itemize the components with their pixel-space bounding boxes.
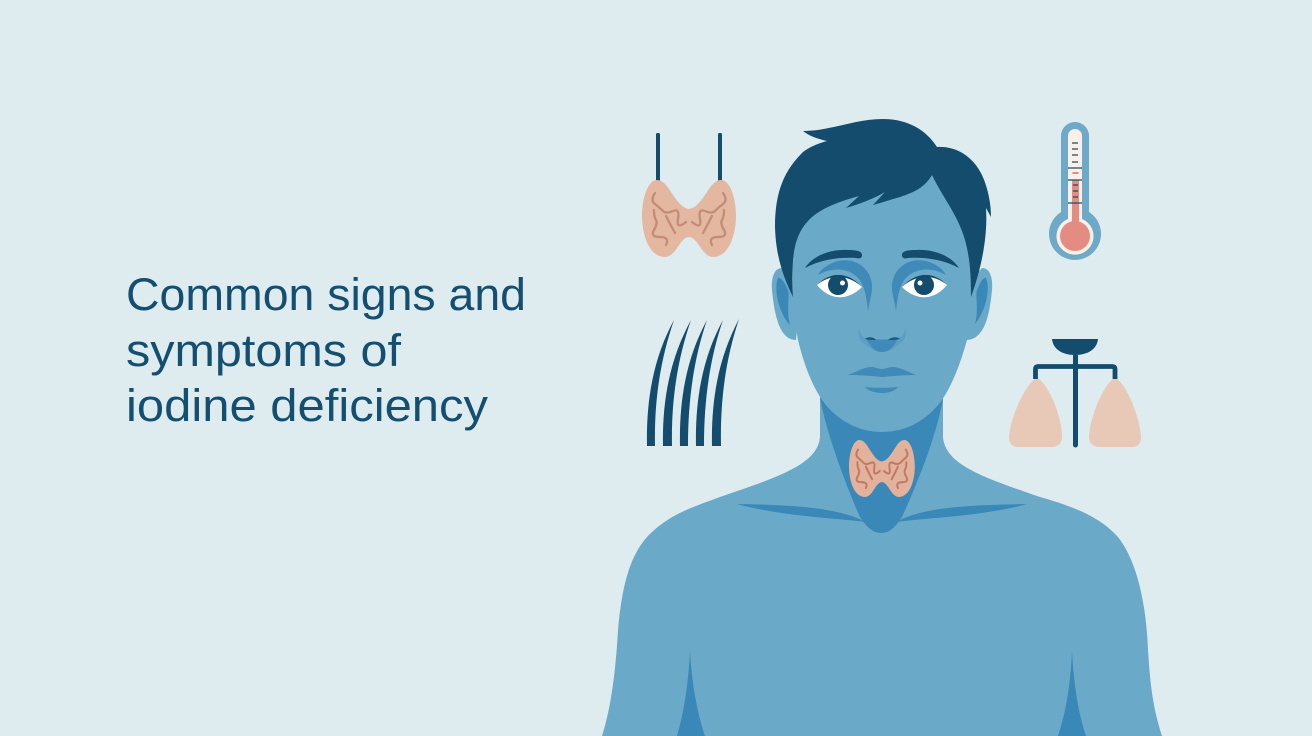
right eye shadow	[892, 260, 946, 311]
mouth	[848, 367, 916, 393]
left arm shadow	[677, 651, 705, 736]
title: iodine deficiency	[126, 380, 489, 431]
right eye	[902, 275, 947, 297]
icon: thyroid on neck	[849, 440, 915, 497]
icon: thermometer	[1049, 122, 1101, 260]
icon: thyroid gland	[642, 133, 736, 257]
right eyebrow	[902, 250, 959, 268]
hair	[775, 119, 991, 297]
right clavicle shadow	[896, 504, 1027, 522]
left eye shadow	[818, 260, 872, 311]
left ear	[772, 268, 800, 340]
left clavicle shadow	[737, 504, 866, 522]
torso and neck	[602, 395, 1162, 736]
left eye	[817, 275, 862, 297]
person figure	[602, 119, 1162, 736]
title: Common signs and	[126, 269, 526, 320]
right arm shadow	[1058, 652, 1086, 736]
right ear	[962, 268, 992, 340]
left eyebrow	[805, 250, 862, 268]
title: symptoms of	[126, 325, 402, 376]
nose	[858, 327, 906, 352]
neck shadow	[820, 398, 943, 533]
face	[792, 160, 971, 432]
icon: hair strands	[647, 319, 739, 446]
icon: lungs	[1009, 339, 1141, 448]
title	[126, 269, 526, 431]
